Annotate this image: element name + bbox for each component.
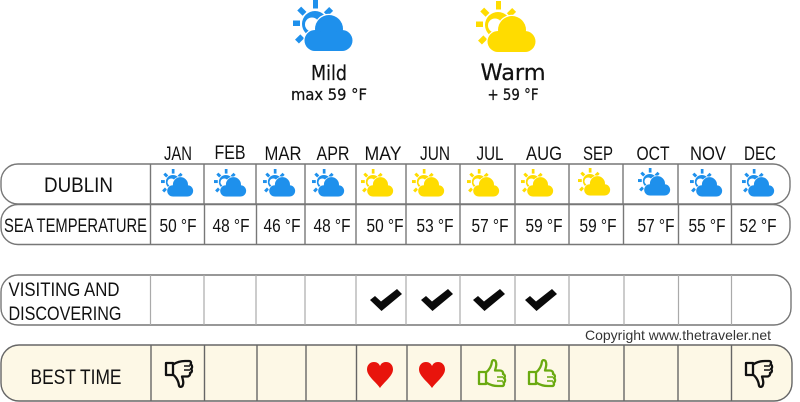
row: Dublin weather [1, 164, 790, 204]
monthly temperatures: 57 °F [472, 216, 509, 236]
icons: check marks May to August [370, 289, 557, 311]
row: sea temperature [1, 204, 790, 244]
monthly temperatures: 59 °F [580, 216, 617, 236]
month headings: MAR [264, 144, 302, 165]
icons: thumbs up July and August [479, 360, 555, 386]
label: visiting and discovering: VISITING AND [8, 280, 120, 301]
month headings: DEC [744, 144, 776, 165]
month headings: MAY [364, 144, 402, 165]
label: Dublin: DUBLIN [44, 174, 113, 197]
monthly weather icons [161, 168, 774, 197]
month headings: JAN [164, 144, 192, 165]
icon: mild sun and cloud [293, 0, 352, 51]
label: visiting and discovering: DISCOVERING [8, 304, 122, 325]
month headings: JUL [476, 144, 504, 165]
legend: warm weather [476, 1, 546, 104]
month headings: APR [316, 144, 350, 165]
monthly temperatures: 46 °F [264, 216, 301, 236]
monthly temperatures: 59 °F [526, 216, 563, 236]
label: Mild: Mild [311, 61, 347, 85]
month headings: AUG [526, 144, 562, 165]
monthly temperatures: 50 °F [160, 216, 197, 236]
icons: hearts May and June [367, 362, 445, 388]
label: Warm: Warm [480, 61, 546, 86]
month headings: JUN [420, 144, 450, 165]
monthly temperatures: 52 °F [740, 216, 777, 236]
icon: thumbs down January [166, 361, 192, 387]
icon: warm sun and cloud [476, 1, 536, 52]
copyright: Copyright www.thetraveler.net [585, 327, 771, 343]
monthly temperatures: 48 °F [314, 216, 351, 236]
monthly temperatures: 53 °F [416, 216, 454, 236]
month headings [164, 143, 776, 165]
month headings: NOV [690, 144, 726, 165]
monthly temperatures: 48 °F [212, 216, 250, 236]
label: max 59 °F: max 59 °F [291, 85, 367, 104]
monthly temperatures: 55 °F [688, 216, 726, 236]
label: visiting and discovering [8, 280, 122, 325]
row: visiting and discovering [1, 275, 791, 325]
label: best time: BEST TIME [30, 366, 122, 389]
monthly temperatures: 57 °F [638, 216, 675, 236]
legend: mild weather [291, 0, 367, 104]
month headings: FEB [214, 143, 246, 164]
monthly temperatures [160, 216, 777, 236]
monthly temperatures: 50 °F [366, 216, 404, 236]
icon: thumbs down December [746, 361, 772, 387]
month headings: SEP [583, 144, 613, 165]
month headings: OCT [636, 144, 670, 165]
row: best time [1, 345, 792, 401]
label: sea temperature: SEA TEMPERATURE [4, 216, 147, 237]
label: + 59 °F: + 59 °F [488, 85, 538, 104]
